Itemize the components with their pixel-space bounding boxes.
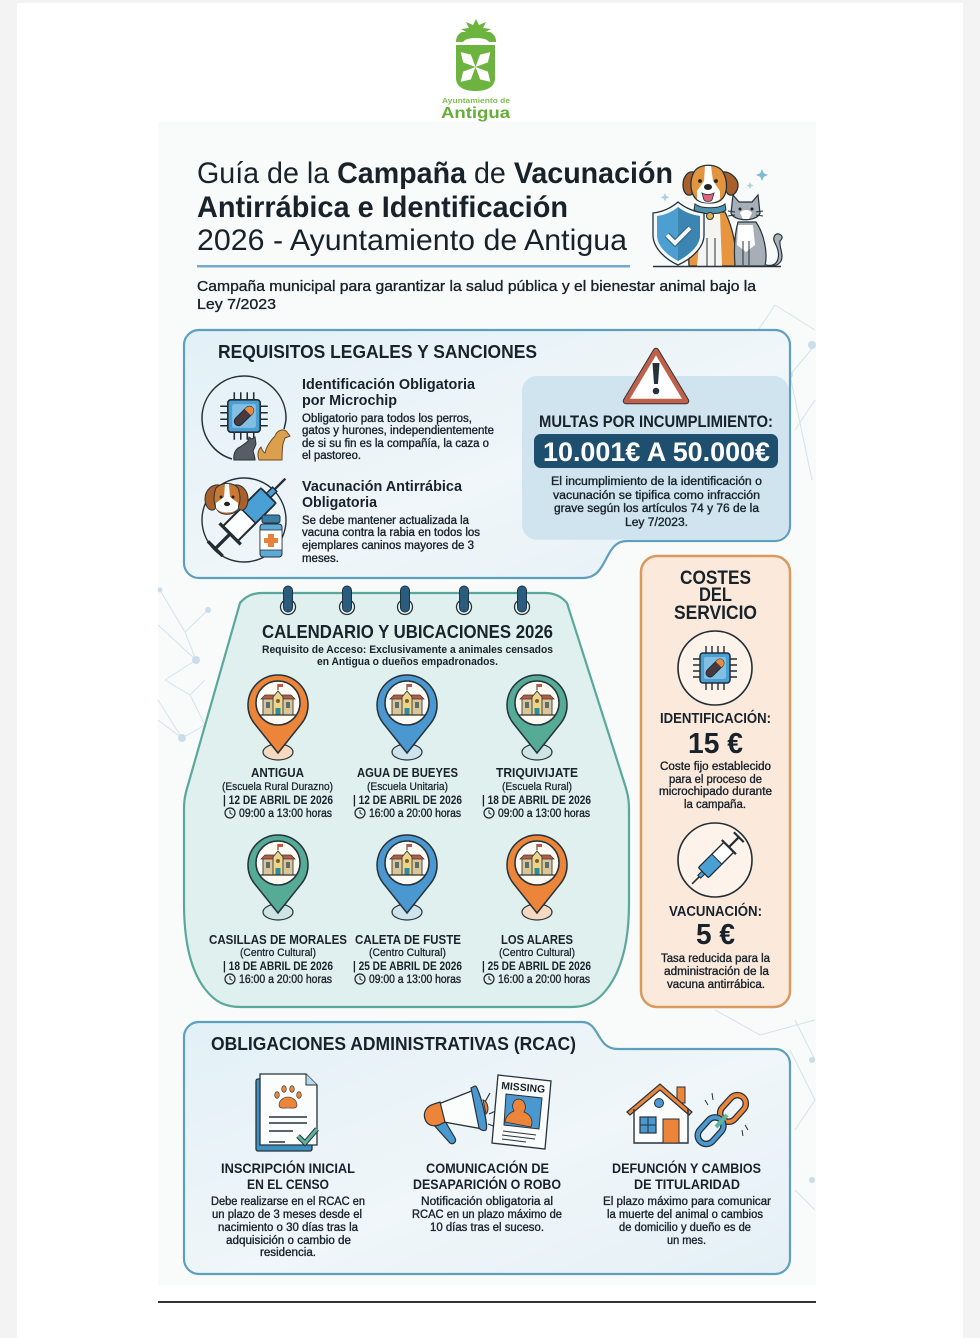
location: Caleta de Fuste: (Centro Cultural) bbox=[369, 947, 446, 959]
location: Casillas de Morales: CASILLAS DE MORALES bbox=[209, 932, 347, 947]
cost: identificación: IDENTIFICACIÓN: bbox=[660, 709, 771, 727]
title: Guía de la Campaña de Vacunación bbox=[197, 157, 673, 190]
text: vacunación antirrábica obligatoria: Obligatoria bbox=[302, 494, 378, 511]
text: multas description: Ley 7/2023. bbox=[625, 517, 688, 529]
cost: vacunación: vacuna antirrábica. bbox=[667, 979, 765, 991]
location: Caleta de Fuste: 09:00 a 13:00 horas bbox=[369, 974, 461, 986]
cost: vacunación: administración de la bbox=[664, 966, 770, 978]
text: defunción y cambios: DEFUNCIÓN Y CAMBIOS bbox=[612, 1159, 761, 1176]
text: inscripción inicial: EN EL CENSO bbox=[247, 1176, 329, 1192]
cost: identificación: 15 € bbox=[688, 728, 743, 760]
text: inscripción inicial: INSCRIPCIÓN INICIAL bbox=[221, 1159, 355, 1176]
location: Agua de Bueyes: 16:00 a 20:00 horas bbox=[369, 808, 461, 820]
text: comunicación de desaparición: DESAPARICIÓN O ROBO bbox=[413, 1175, 561, 1192]
text: inscripción inicial: residencia. bbox=[260, 1247, 316, 1259]
text: defunción y cambios: DE TITULARIDAD bbox=[634, 1176, 740, 1192]
heading: calendario bbox=[262, 622, 553, 668]
heading: requisitos: REQUISITOS LEGALES Y SANCIONES bbox=[218, 342, 537, 362]
heading: calendario: CALENDARIO Y UBICACIONES 2026 bbox=[262, 622, 553, 642]
text: inscripción inicial: adquisición o cambio de bbox=[226, 1235, 351, 1247]
location: Caleta de Fuste bbox=[353, 835, 462, 986]
icon: dog, cat and shield bbox=[653, 165, 782, 266]
location: Los Alares: (Centro Cultural) bbox=[499, 947, 575, 959]
location: Los Alares bbox=[482, 835, 591, 986]
icon: missing poster: MISSING bbox=[501, 1080, 546, 1096]
text: multas description: El incumplimiento de la identificación o bbox=[551, 476, 762, 488]
location: Los Alares: 16:00 a 20:00 horas bbox=[498, 974, 590, 986]
cost: vacunación: Tasa reducida para la bbox=[661, 953, 771, 965]
text: comunicación de desaparición: 10 días tras el suceso. bbox=[430, 1222, 544, 1234]
icon: census document bbox=[256, 1074, 317, 1151]
text: defunción y cambios: de domicilio y dueño es de bbox=[619, 1222, 751, 1234]
text: defunción y cambios bbox=[603, 1159, 771, 1247]
location: Antigua: ANTIGUA bbox=[251, 765, 305, 780]
location: Agua de Bueyes bbox=[353, 675, 462, 820]
icon: syringe bbox=[678, 823, 752, 897]
text: identificación obligatoria: gatos y hurones, independientemente bbox=[302, 425, 494, 437]
title: 2026 - Ayuntamiento de Antigua bbox=[197, 224, 627, 257]
panel: costes del servicio bbox=[641, 556, 790, 1007]
location: Triquivijate: TRIQUIVIJATE bbox=[496, 765, 578, 780]
subtitle: Campaña municipal para garantizar la salud pública y el bienestar animal bajo la bbox=[197, 278, 757, 295]
icon: dog and syringe bbox=[202, 468, 296, 562]
text: identificación obligatoria bbox=[302, 376, 494, 462]
text: inscripción inicial: Debe realizarse en el RCAC en bbox=[211, 1196, 365, 1208]
text: multas description: grave según los artículos 74 y 76 de la bbox=[554, 503, 760, 515]
icon: microchip bbox=[678, 631, 752, 705]
heading: costes bbox=[674, 568, 757, 624]
inner infographic sheet bbox=[158, 122, 816, 1285]
location: Casillas de Morales: (Centro Cultural) bbox=[240, 947, 316, 959]
location: Triquivijate: 09:00 a 13:00 horas bbox=[498, 808, 590, 820]
location: Agua de Bueyes: AGUA DE BUEYES bbox=[357, 765, 458, 780]
location: Triquivijate: | 18 DE ABRIL DE 2026 bbox=[482, 795, 591, 807]
location: Casillas de Morales bbox=[209, 835, 347, 986]
cost: vacunación: 5 € bbox=[696, 919, 735, 951]
text: identificación obligatoria: el pastoreo. bbox=[302, 450, 361, 462]
logo: Ayuntamiento de Antigua: Antigua bbox=[441, 105, 510, 122]
text: vacunación antirrábica obligatoria: vacuna contra la rabia en todos los bbox=[302, 527, 480, 539]
icon: megaphone bbox=[424, 1086, 498, 1144]
cost: identificación: Coste fijo establecido bbox=[660, 761, 771, 773]
heading: obligaciones: OBLIGACIONES ADMINISTRATIVAS (RCAC) bbox=[211, 1034, 576, 1054]
icon: house bbox=[627, 1084, 692, 1143]
text: inscripción inicial: un plazo de 3 meses desde el bbox=[212, 1209, 362, 1221]
text: multas description bbox=[551, 476, 762, 529]
location: Caleta de Fuste: | 25 DE ABRIL DE 2026 bbox=[353, 961, 462, 973]
cost: vacunación bbox=[661, 902, 771, 991]
text: comunicación de desaparición bbox=[412, 1159, 562, 1234]
text: multas description: vacunación se tipifica como infracción bbox=[553, 490, 760, 502]
text: defunción y cambios: un mes. bbox=[667, 1235, 706, 1247]
heading: calendario: en Antigua o dueños empadronados. bbox=[317, 656, 498, 668]
calendar rings bbox=[280, 586, 530, 614]
location: Antigua: (Escuela Rural Durazno) bbox=[222, 781, 333, 793]
icon: warning triangle bbox=[626, 351, 686, 401]
text: vacunación antirrábica obligatoria: Vacunación Antirrábica bbox=[302, 478, 463, 495]
icon: chain link bbox=[694, 1092, 749, 1148]
logo: Ayuntamiento de Antigua: Ayuntamiento de bbox=[442, 96, 510, 105]
location: Los Alares: LOS ALARES bbox=[501, 932, 573, 947]
location: Agua de Bueyes: (Escuela Unitaria) bbox=[367, 781, 448, 793]
text: inscripción inicial: nacimiento o 30 días tras la bbox=[218, 1222, 359, 1234]
heading: costes: SERVICIO bbox=[674, 603, 757, 624]
text: identificación obligatoria: de si su fin es la compañía, la caza o bbox=[302, 438, 489, 450]
location: Antigua: 09:00 a 13:00 horas bbox=[239, 808, 332, 820]
cost: identificación: la campaña. bbox=[684, 799, 746, 811]
panel: requisitos legales y sanciones bbox=[184, 330, 790, 578]
icon: microchip with pets bbox=[202, 376, 290, 460]
text: comunicación de desaparición: RCAC en un plazo máximo de bbox=[412, 1209, 562, 1221]
text: vacunación antirrábica obligatoria: Se debe mantener actualizada la bbox=[302, 515, 470, 527]
location: Los Alares: | 25 DE ABRIL DE 2026 bbox=[482, 961, 591, 973]
location: Antigua bbox=[222, 675, 333, 820]
text: vacunación antirrábica obligatoria: ejemplares caninos mayores de 3 bbox=[302, 540, 474, 552]
text: comunicación de desaparición: COMUNICACIÓN DE bbox=[426, 1159, 549, 1176]
location: Casillas de Morales: 16:00 a 20:00 horas bbox=[239, 974, 332, 986]
icon: missing poster bbox=[492, 1075, 551, 1149]
subtitle: Ley 7/2023 bbox=[197, 296, 276, 313]
location: Agua de Bueyes: | 12 DE ABRIL DE 2026 bbox=[353, 795, 462, 807]
text: vacunación antirrábica obligatoria bbox=[302, 478, 480, 565]
subtitle bbox=[197, 278, 757, 313]
location: Antigua: | 12 DE ABRIL DE 2026 bbox=[223, 795, 333, 807]
text: identificación obligatoria: Identificación Obligatoria bbox=[302, 376, 476, 393]
cost: identificación: microchipado durante bbox=[659, 786, 772, 798]
panel: obligaciones administrativas bbox=[184, 1022, 790, 1274]
cost: identificación: para el proceso de bbox=[669, 774, 762, 786]
text: inscripción inicial bbox=[211, 1159, 365, 1259]
text: comunicación de desaparición: Notificación obligatoria al bbox=[421, 1196, 553, 1208]
location: Triquivijate: (Escuela Rural) bbox=[502, 781, 572, 793]
text: multas heading: MULTAS POR INCUMPLIMIENTO: bbox=[539, 413, 773, 431]
heading: calendario: Requisito de Acceso: Exclusivamente a animales censados bbox=[262, 644, 553, 656]
heading: costes: DEL bbox=[699, 585, 732, 606]
location: Caleta de Fuste: CALETA DE FUSTE bbox=[355, 932, 461, 947]
heading: costes: COSTES bbox=[680, 568, 751, 589]
text: identificación obligatoria: por Microchip bbox=[302, 392, 397, 409]
location: Casillas de Morales: | 18 DE ABRIL DE 2026 bbox=[223, 961, 333, 973]
title: Antirrábica e Identificación bbox=[197, 191, 568, 224]
cost: identificación bbox=[659, 709, 772, 811]
text: vacunación antirrábica obligatoria: meses. bbox=[302, 553, 339, 565]
callout: multas bbox=[522, 351, 789, 540]
fine amount: 10.001€ A 50.000€ bbox=[543, 437, 770, 467]
text: defunción y cambios: la muerte del animal o cambios bbox=[607, 1209, 763, 1221]
text: defunción y cambios: El plazo máximo para comunicar bbox=[603, 1196, 771, 1208]
panel: calendario y ubicaciones bbox=[184, 586, 629, 1007]
text: identificación obligatoria: Obligatorio para todos los perros, bbox=[302, 413, 472, 425]
cost: vacunación: VACUNACIÓN: bbox=[669, 902, 762, 920]
location: Triquivijate bbox=[482, 675, 591, 820]
logo: Ayuntamiento de Antigua bbox=[441, 19, 510, 122]
title bbox=[197, 157, 673, 268]
